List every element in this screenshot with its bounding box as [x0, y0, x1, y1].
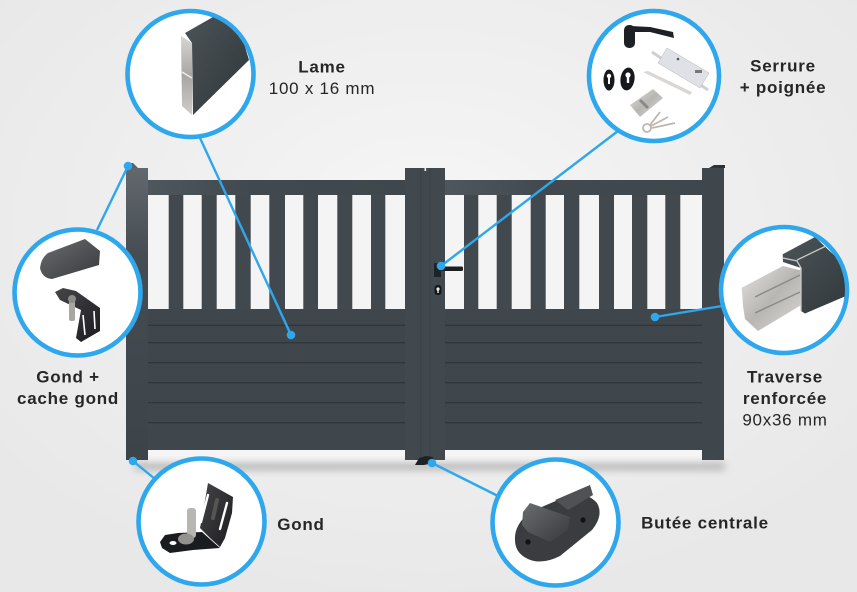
icon: slat face	[185, 14, 249, 115]
icon: stop block	[522, 503, 570, 542]
label: traverse: Traverse	[747, 368, 823, 386]
label: serrure: + poignée	[740, 78, 826, 97]
icon: escutcheons	[604, 67, 636, 91]
label: traverse	[742, 368, 828, 430]
label: lame	[269, 58, 375, 98]
icon: slat profile	[181, 36, 192, 115]
icon: door handle	[624, 25, 674, 48]
connector lines	[97, 131, 722, 496]
icon: small hinge	[55, 288, 100, 342]
icon: rail edge	[783, 246, 826, 311]
keyhole	[434, 285, 442, 295]
icon: screw holes	[525, 517, 586, 545]
icon: hinge plate	[200, 483, 233, 547]
label: lame: 100 x 16 mm	[269, 79, 375, 98]
pickets	[169, 195, 680, 310]
icon: rail shadow	[755, 275, 800, 313]
left post	[126, 168, 148, 460]
label: serrure	[740, 56, 826, 97]
top rails	[147, 180, 703, 195]
central stop	[415, 456, 434, 465]
left post cap	[127, 163, 138, 168]
circle: serrure	[589, 11, 719, 141]
icon: reinforced rail silver	[742, 266, 803, 331]
label: serrure: Serrure	[750, 56, 816, 76]
icon: stop arm	[555, 485, 593, 510]
label: traverse: renforcée	[743, 389, 827, 408]
circle: gond	[138, 458, 264, 584]
right post cap	[709, 165, 725, 168]
icon: plate slots	[201, 495, 227, 529]
icon: bolt	[178, 508, 196, 544]
label: traverse: 90x36 mm	[742, 410, 828, 430]
gate	[126, 163, 725, 470]
icon: hinge base	[160, 532, 220, 553]
icon: hinge cover	[40, 239, 100, 279]
label: gond et cache gond: Gond +	[36, 368, 100, 386]
label: butee centrale: Butée centrale	[641, 514, 769, 532]
icon: lock body	[652, 48, 709, 90]
ground shadow	[135, 450, 725, 470]
label: gond: Gond	[277, 515, 325, 534]
label: lame: Lame	[298, 58, 346, 76]
label: gond et cache gond	[17, 368, 119, 408]
icon: stop base	[515, 495, 600, 562]
connector dots	[124, 162, 659, 467]
circle: gond et cache gond	[14, 230, 140, 356]
circle: traverse	[721, 227, 857, 353]
gate openings	[148, 195, 702, 309]
right post	[702, 168, 724, 460]
icon: reinforced rail dark	[782, 237, 845, 314]
panel lines	[147, 325, 703, 423]
circle: butee centrale	[492, 460, 618, 586]
circle: lame	[128, 11, 254, 137]
handle	[434, 263, 463, 277]
lower panels	[147, 309, 703, 450]
icon: keys	[643, 112, 675, 132]
centre posts	[405, 168, 445, 460]
icon: strike plate	[643, 71, 692, 95]
label: gond et cache gond: cache gond	[17, 389, 119, 408]
icon: cylinder	[630, 89, 663, 117]
